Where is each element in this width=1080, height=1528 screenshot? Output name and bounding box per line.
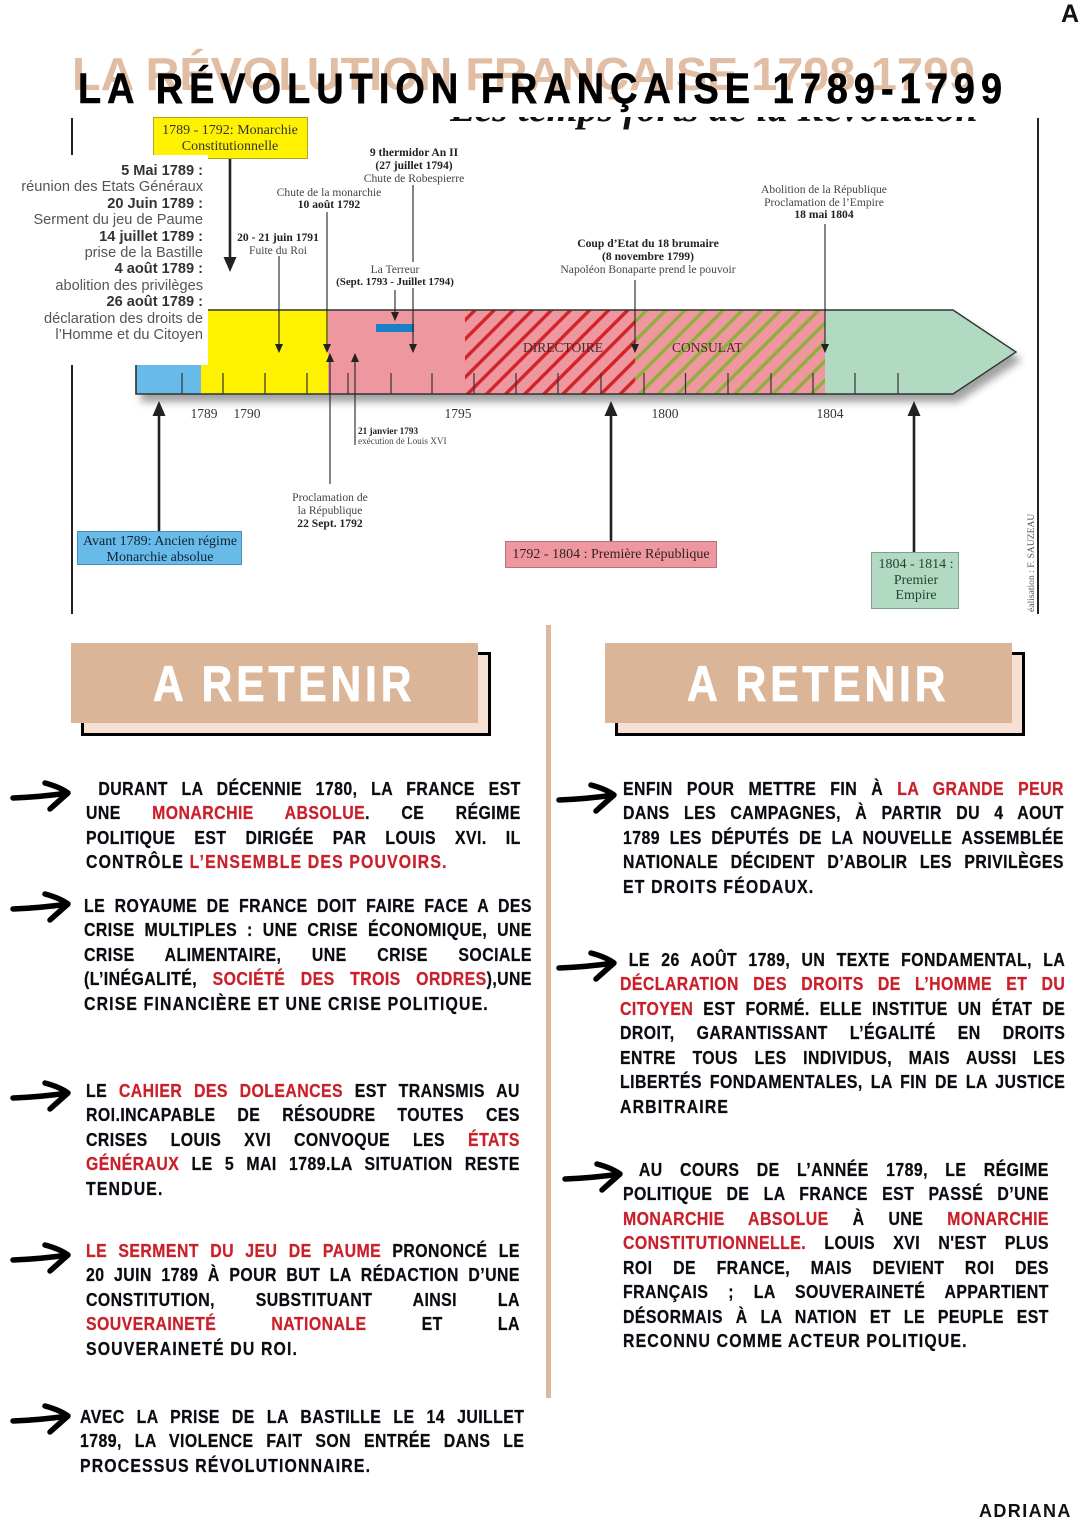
arrow 2 [10, 891, 71, 923]
thin event arrows [279, 185, 825, 484]
timeline chart [71, 118, 1039, 614]
text block 2: LE ROYAUME DE FRANCE DOIT FAIRE FACE A DES [84, 896, 532, 916]
event labels: la République [298, 504, 362, 517]
text block 8: RECONNU COMME ACTEUR POLITIQUE. [623, 1331, 968, 1351]
box: premier empire [872, 552, 958, 608]
text block 7: ENTRE TOUS LES INDIVIDUS, MAIS AUSSI LES [620, 1048, 1065, 1068]
event labels: 20 - 21 juin 1791 [237, 231, 319, 244]
text block 8: CONSTITUTIONNELLE. LOUIS XVI N'EST PLUS [623, 1233, 1049, 1253]
text block 2: CRISE ALIMENTAIRE, UNE CRISE SOCIALE [84, 945, 532, 965]
text block 6: ET DROITS FÉODAUX. [623, 877, 814, 897]
text block 6: NATIONALE DÉCIDENT D’ABOLIR LES PRIVILÈGES [623, 852, 1064, 872]
text block 8: POLITIQUE DE LA FRANCE EST PASSÉ D’UNE [623, 1184, 1049, 1204]
event labels: (Sept. 1793 - Juillet 1794) [336, 276, 454, 288]
text block 7: DÉCLARATION DES DROITS DE L’HOMME ET DU [620, 974, 1065, 994]
text block 2: CRISE MULTIPLES : UNE CRISE ÉCONOMIQUE, UNE [84, 920, 532, 940]
event labels: exécution de Louis XVI [358, 436, 447, 446]
box: monarchie absolue: Avant 1789: Ancien régime [83, 534, 237, 549]
period labels: CONSULAT [672, 340, 743, 355]
arrow 5 [10, 1403, 71, 1435]
text block 5: 1789, LA VIOLENCE FAIT SON ENTRÉE DANS LE [80, 1431, 524, 1451]
event labels: Chute de la monarchie [277, 186, 381, 199]
event labels: Proclamation de [292, 491, 368, 504]
background title ghost: LA RÉVOLUTION FRANÇAISE 1798-1799 [72, 48, 975, 100]
text block 4 [86, 1240, 520, 1359]
central divider [546, 625, 551, 1398]
text block 8: DÉSORMAIS À LA NATION ET LE PEUPLE EST [623, 1307, 1049, 1327]
list of 1789 dates: 26 août 1789 : [106, 294, 203, 310]
text block 3: ROI.INCAPABLE DE RÉSOUDRE TOUTES CES [86, 1105, 520, 1125]
arrow 7 [556, 950, 617, 982]
text block 6: 1789 LES DÉPUTÉS DE LA NOUVELLE ASSEMBLÉE [623, 828, 1064, 848]
text block 8: AU COURS DE L’ANNÉE 1789, LE RÉGIME [639, 1160, 1049, 1180]
list of 1789 dates: Serment du jeu de Paume [33, 212, 203, 228]
year labels: 1790 [234, 406, 261, 421]
list of 1789 dates: 20 Juin 1789 : [107, 196, 203, 212]
text block 3: CRISES LOUIS XVI CONVOQUE LES ÉTATS [86, 1130, 520, 1150]
list of 1789 dates: réunion des Etats Généraux [21, 179, 203, 195]
text block 3: LE CAHIER DES DOLEANCES EST TRANSMIS AU [86, 1081, 520, 1101]
event labels: La Terreur [371, 263, 420, 276]
year labels: 1795 [444, 406, 472, 421]
thick arrow: monarchie constitutionnelle [224, 158, 236, 272]
heading card: a retenir right [605, 643, 1025, 736]
heading card: a retenir left [71, 643, 491, 736]
text block 1 [86, 778, 521, 872]
text block 7: DROIT, GARANTISSANT L’ÉGALITÉ EN DROITS [620, 1023, 1065, 1043]
text block 3: GÉNÉRAUX LE 5 MAI 1789.LA SITUATION RESTE [86, 1154, 520, 1174]
thick arrows: up [152, 401, 920, 552]
event labels: 21 janvier 1793 [358, 426, 418, 436]
text block 1: DURANT LA DÉCENNIE 1780, LA FRANCE EST [98, 779, 521, 799]
text block 7: LIBERTÉS FONDAMENTALES, LA FIN DE LA JUSTICE [620, 1072, 1065, 1092]
list of 1789 dates [21, 163, 203, 343]
arrow 4 [10, 1242, 71, 1274]
text block 2 [84, 896, 532, 1014]
text block 5: AVEC LA PRISE DE LA BASTILLE LE 14 JUILLET [80, 1407, 524, 1427]
white panel behind dates [74, 155, 208, 365]
text block 4: CONSTITUTION, SUBSTITUANT AINSI LA [86, 1290, 520, 1310]
arrow 6 [556, 782, 617, 814]
heading card: a retenir left: A RETENIR [153, 656, 411, 712]
event labels [237, 146, 887, 530]
year labels [190, 406, 844, 421]
text block 5 [80, 1407, 524, 1476]
event labels: 22 Sept. 1792 [297, 517, 363, 530]
event labels: 10 août 1792 [298, 198, 360, 211]
year labels: 1800 [652, 406, 679, 421]
list of 1789 dates: prise de la Bastille [85, 245, 203, 261]
event labels: Napoléon Bonaparte prend le pouvoir [560, 263, 736, 276]
box: monarchie absolue [78, 532, 242, 565]
event labels: Fuite du Roi [249, 244, 307, 257]
list of 1789 dates: 4 août 1789 : [115, 261, 203, 277]
text block 6: DANS LES CAMPAGNES, À PARTIR DU 4 AOUT [623, 803, 1064, 823]
text block 7: CITOYEN EST FORMÉ. ELLE INSTITUE UN ÉTAT DE [620, 999, 1065, 1019]
text block 3: TENDUE. [86, 1179, 164, 1199]
text block 7: ARBITRAIRE [620, 1097, 729, 1117]
event labels: (8 novembre 1799) [602, 250, 694, 263]
event labels: 9 thermidor An II [370, 146, 459, 159]
box: premier empire: Premier [894, 573, 938, 588]
year labels: 1789 [190, 406, 218, 421]
arrow 3 [10, 1080, 71, 1112]
text block 2: CRISE FINANCIÈRE ET UNE CRISE POLITIQUE. [84, 994, 489, 1014]
box: monarchie absolue: Monarchie absolue [107, 550, 213, 565]
text block 5: PROCESSUS RÉVOLUTIONNAIRE. [80, 1456, 371, 1476]
box: premiere republique [506, 542, 716, 568]
list of 1789 dates: déclaration des droits de [44, 311, 203, 327]
text block 4: 20 JUIN 1789 À POUR BUT LA RÉDACTION D’UNE [86, 1265, 520, 1285]
text block 8: FRANÇAIS ; LA SOUVERAINETÉ APPARTIENT [623, 1282, 1049, 1302]
event labels: Abolition de la République [761, 183, 887, 196]
text block 8: ROI DE FRANCE, MAIS DEVIENT ROI DES [623, 1258, 1049, 1278]
text block 4: LE SERMENT DU JEU DE PAUME PRONONCÉ LE [86, 1241, 520, 1261]
list of 1789 dates: 14 juillet 1789 : [99, 229, 203, 245]
terror period marker [376, 324, 414, 332]
text block 3 [86, 1081, 520, 1199]
heading: corner letter: A [1061, 0, 1079, 28]
event labels: Coup d’Etat du 18 brumaire [577, 237, 719, 250]
credit: éalisation : F. SAUZEAU [1026, 514, 1037, 612]
box: premiere republique: 1792 - 1804 : Première République [512, 547, 710, 562]
text block 7: LE 26 AOÛT 1789, UN TEXTE FONDAMENTAL, LA [629, 950, 1065, 970]
main title: LA RÉVOLUTION FRANÇAISE 1789-1799 [78, 64, 1002, 113]
period labels: DIRECTOIRE [523, 340, 603, 355]
text block 1: UNE MONARCHIE ABSOLUE. CE RÉGIME [86, 803, 521, 823]
box: monarchie constitutionnelle [153, 117, 308, 159]
box: monarchie constitutionnelle: 1789 - 1792: Monarchie [162, 123, 298, 138]
author signature: ADRIANA [979, 1501, 1072, 1521]
arrow bar shadow [141, 318, 1022, 402]
box: monarchie constitutionnelle: Constitutionnelle [182, 139, 278, 154]
event labels: Chute de Robespierre [364, 172, 464, 185]
text block 7 [620, 949, 1065, 1117]
event labels: Proclamation de l’Empire [764, 196, 884, 209]
text block 4: SOUVERAINETÉ NATIONALE ET LA [86, 1314, 520, 1334]
period labels [523, 340, 743, 355]
box: premier empire: 1804 - 1814 : [878, 557, 954, 572]
timeline bar [136, 310, 1016, 394]
text block 6: ENFIN POUR METTRE FIN À LA GRANDE PEUR [623, 779, 1064, 799]
text block 4: SOUVERAINETÉ DU ROI. [86, 1339, 298, 1359]
year labels: 1804 [816, 406, 844, 421]
arrow 1 [10, 780, 71, 812]
frame lines [72, 118, 1038, 614]
text block 8: MONARCHIE ABSOLUE À UNE MONARCHIE [623, 1209, 1049, 1229]
event labels: 18 mai 1804 [794, 208, 854, 221]
text block 1: POLITIQUE EST DIRIGÉE PAR LOUIS XVI. IL [86, 828, 521, 848]
text block 6 [623, 778, 1064, 897]
list of 1789 dates: l’Homme et du Citoyen [55, 327, 203, 343]
box: premier empire: Empire [895, 588, 937, 603]
arrow 8 [562, 1161, 623, 1193]
list of 1789 dates: 5 Mai 1789 : [121, 163, 203, 179]
text block 8 [623, 1159, 1049, 1352]
year ticks [182, 373, 898, 394]
heading card: a retenir right: A RETENIR [687, 656, 945, 712]
list of 1789 dates: abolition des privilèges [55, 278, 203, 294]
event labels: (27 juillet 1794) [375, 159, 453, 172]
text block 1: CONTRÔLE L’ENSEMBLE DES POUVOIRS. [86, 852, 448, 872]
text block 2: (L’INÉGALITÉ, SOCIÉTÉ DES TROIS ORDRES),UNE [84, 969, 532, 989]
